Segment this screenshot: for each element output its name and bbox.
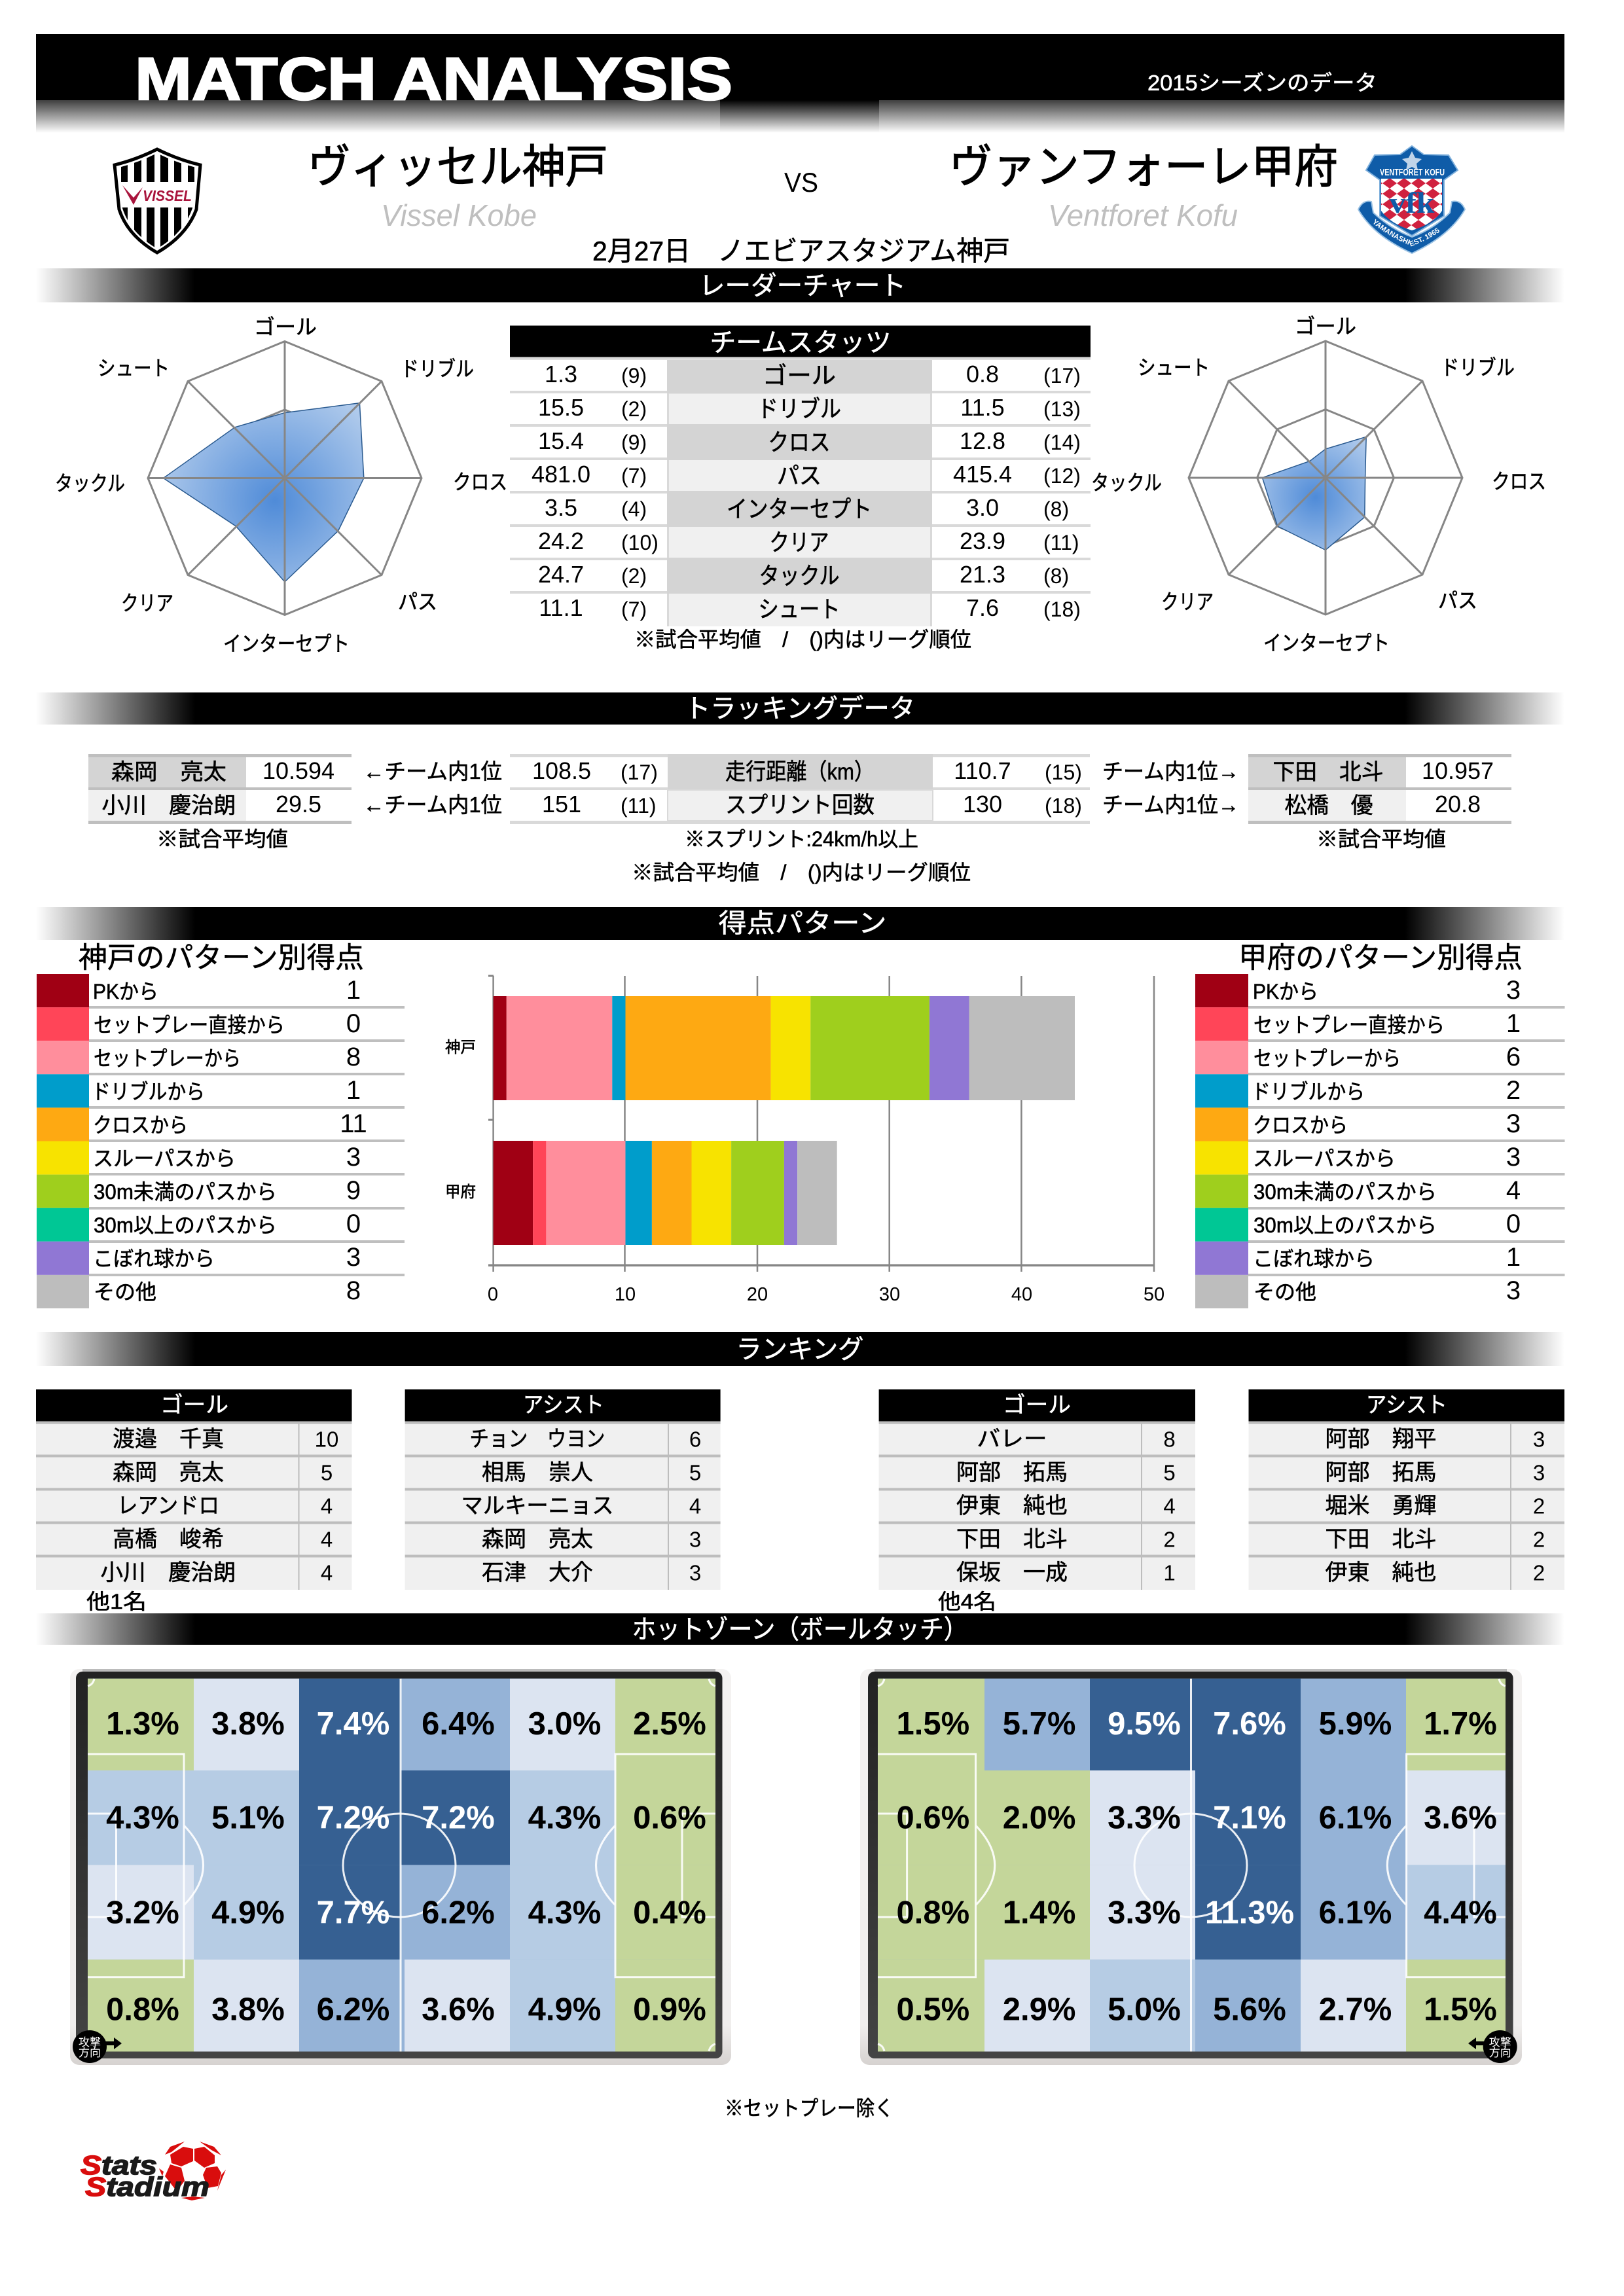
team stats table: 481.0: [532, 461, 590, 488]
team stats table: (7): [621, 598, 647, 621]
icon: Ventforet Kofu crest: vfk: [1389, 186, 1435, 219]
ranking table: Kobe goals: 4: [321, 1494, 333, 1518]
section bar: tracking data: トラッキングデータ: [685, 694, 915, 723]
radar chart: Kobe: クロス: [453, 470, 507, 493]
heat map: Kobe pitch: 3.8%: [211, 1992, 285, 2028]
footnotes: tracking: ※スプリント:24km/h以上: [685, 827, 918, 851]
legend panel: Kofu scoring patterns: [1195, 942, 1564, 1308]
heat map: Kofu pitch: 9.5%: [1108, 1706, 1181, 1742]
footnote: set plays excluded: ※セットプレー除く: [725, 2096, 893, 2120]
ranking table: Kobe goals: 高橋 峻希: [113, 1527, 224, 1552]
heat map: Kobe pitch: 2.5%: [633, 1706, 706, 1742]
ranking table: Kofu goals: 保坂 一成: [956, 1560, 1068, 1585]
header band: [36, 34, 1564, 133]
ranking table: Kofu goals: 2: [1163, 1528, 1176, 1552]
note: team first right: チーム内1位→: [1102, 793, 1239, 817]
heat map: Kofu pitch: 5.6%: [1213, 1992, 1286, 2028]
team stats table: 7.6: [966, 594, 999, 621]
heat map: Kobe pitch: 0.9%: [633, 1992, 706, 2028]
legend panel: Kofu scoring patterns: 3: [1506, 1276, 1521, 1305]
legend panel: Kobe scoring patterns: 11: [340, 1109, 367, 1138]
legend panel: Kofu scoring patterns: 30m以上のパスから: [1254, 1213, 1437, 1237]
legend panel: Kofu scoring patterns: その他: [1254, 1280, 1316, 1304]
team stats table: 12.8: [960, 427, 1005, 454]
team stats table: クリア: [770, 529, 829, 556]
heat map: Kobe pitch: 4.3%: [106, 1800, 179, 1835]
team stats table: 24.7: [538, 561, 584, 588]
tracking table: Kobe top players: [88, 754, 352, 824]
heat map: Kofu pitch: 0.5%: [897, 1992, 969, 2028]
stacked bar chart: goals by pattern: 30: [879, 1284, 900, 1305]
title: MATCH ANALYSIS: [135, 46, 732, 113]
radar chart: Kobe: インターセプト: [223, 632, 350, 656]
icon: Vissel Kobe crest: [115, 149, 200, 253]
footnotes: tracking: ※試合平均値: [156, 827, 288, 851]
ranking table: Kofu goals: バレー: [977, 1427, 1047, 1452]
note: others: 他4名: [938, 1590, 996, 1613]
ranking table: Kofu assists: 2: [1533, 1561, 1545, 1585]
legend panel: Kobe scoring patterns: 30m以上のパスから: [94, 1213, 277, 1237]
heat map: Kobe pitch: 6.2%: [422, 1895, 495, 1930]
heat map: Kobe pitch: 3.0%: [528, 1706, 601, 1742]
heat map: Kofu pitch: 3.3%: [1108, 1895, 1181, 1930]
legend panel: Kobe scoring patterns: 3: [346, 1243, 361, 1272]
legend panel: Kobe scoring patterns: その他: [94, 1280, 156, 1304]
team stats table: 24.2: [538, 528, 584, 554]
legend panel: Kofu scoring patterns: 4: [1506, 1176, 1521, 1205]
ranking table: Kofu assists: 伊東 純也: [1325, 1560, 1436, 1585]
heat map: Kobe pitch: 4.3%: [528, 1800, 601, 1835]
footnotes: tracking: [156, 827, 1446, 884]
ranking table: Kofu assists: 2: [1533, 1494, 1545, 1518]
heat map: Kobe pitch: 4.9%: [211, 1895, 285, 1930]
radar chart: Kofu: クリア: [1161, 590, 1214, 614]
heat map: Kofu pitch: 1.4%: [1003, 1895, 1075, 1930]
tracking table: Kofu top players: [1248, 754, 1511, 824]
legend panel: Kofu scoring patterns: 30m未満のパスから: [1254, 1180, 1437, 1204]
ranking table: Kobe goals: 森岡 亮太: [113, 1460, 224, 1485]
ranking table: Kobe assists: 相馬 崇人: [482, 1460, 593, 1485]
heat map: Kofu pitch: 0.6%: [897, 1800, 969, 1835]
ranking table: Kobe goals: レアンドロ: [117, 1494, 219, 1518]
ranking table: Kofu goals: 4: [1163, 1494, 1176, 1518]
footnote: team stats: ※試合平均値 / ()内はリーグ順位: [634, 628, 971, 651]
tracking table: team comparison: (11): [621, 794, 657, 817]
ranking table: Kobe assists: 4: [689, 1494, 701, 1518]
team name: Vissel Kobe: ヴィッセル神戸: [308, 141, 608, 192]
tracking table: Kobe top players: 小川 慶治朗: [102, 793, 236, 818]
legend panel: Kofu scoring patterns: PKから: [1253, 980, 1318, 1003]
legend panel: Kofu scoring patterns: 甲府のパターン別得点: [1238, 942, 1523, 974]
tracking table: team comparison: 130: [963, 791, 1002, 817]
heat map: Kofu pitch: 2.7%: [1319, 1992, 1392, 2028]
legend panel: Kobe scoring patterns: セットプレー直接から: [94, 1013, 285, 1037]
tracking table: team comparison: 108.5: [532, 757, 591, 784]
legend panel: Kobe scoring patterns: こぼれ球から: [93, 1247, 215, 1270]
team stats table: (8): [1043, 564, 1069, 588]
radar chart: Kobe: [55, 315, 507, 656]
icon: Ventforet Kofu crest: [1358, 145, 1466, 254]
team name: Vissel Kobe: Vissel Kobe: [381, 198, 537, 232]
team stats table: (12): [1043, 464, 1081, 488]
season note: 2015シーズンのデータ: [1147, 71, 1377, 95]
legend panel: Kofu scoring patterns: 3: [1506, 1143, 1521, 1172]
team name: Ventforet Kofu: ヴァンフォーレ甲府: [949, 141, 1338, 192]
legend panel: Kobe scoring patterns: スルーパスから: [93, 1147, 236, 1170]
ranking table: Kofu assists: 3: [1533, 1461, 1545, 1485]
icon: attack direction right: 攻撃: [79, 2036, 101, 2049]
legend panel: Kobe scoring patterns: 神戸のパターン別得点: [79, 942, 364, 974]
ranking table: Kofu assists: 阿部 拓馬: [1325, 1460, 1436, 1485]
tracking table: Kofu top players: 下田 北斗: [1272, 760, 1384, 785]
ranking table: Kobe goals: 4: [321, 1561, 333, 1585]
legend panel: Kobe scoring patterns: PKから: [93, 980, 158, 1003]
legend panel: Kofu scoring patterns: 3: [1506, 976, 1521, 1005]
radar chart: Kobe: クリア: [121, 592, 173, 615]
heat map: Kobe pitch: 0.8%: [106, 1992, 179, 2028]
tracking table: Kofu top players: 松橋 優: [1284, 793, 1373, 818]
team stats table: クロス: [768, 429, 830, 456]
note: team first left: ←チーム内1位: [363, 759, 502, 783]
team stats table: [510, 326, 1091, 651]
heat map: Kofu pitch: 4.4%: [1424, 1895, 1497, 1930]
section bar: ranking: [36, 1332, 1564, 1366]
ranking table: Kobe assists: 石津 大介: [482, 1560, 593, 1585]
ranking table: Kobe goals: 小川 慶治朗: [101, 1560, 236, 1585]
team stats table: 15.4: [538, 427, 584, 454]
ranking table: Kofu goals: 8: [1163, 1427, 1176, 1452]
legend panel: Kobe scoring patterns: 8: [346, 1276, 361, 1305]
ranking table: Kobe assists: チョン ウヨン: [470, 1427, 605, 1452]
section bar: radar chart: レーダーチャート: [699, 272, 906, 300]
stacked bar chart: goals by pattern: 40: [1011, 1284, 1032, 1305]
tracking table: team comparison: (17): [621, 761, 658, 784]
legend panel: Kobe scoring patterns: [37, 942, 405, 1308]
ranking table: Kofu assists: 阿部 翔平: [1325, 1427, 1436, 1452]
section bar: radar chart: [36, 268, 1564, 302]
heat map: Kobe pitch: 7.2%: [317, 1800, 389, 1835]
legend panel: Kofu scoring patterns: こぼれ球から: [1253, 1247, 1375, 1270]
team stats table: 11.5: [960, 394, 1005, 421]
note: team first left: ←チーム内1位: [363, 793, 502, 817]
heat map: Kobe pitch: 3.8%: [211, 1706, 285, 1742]
legend panel: Kofu scoring patterns: 3: [1506, 1109, 1521, 1138]
radar chart: Kofu: ドリブル: [1441, 356, 1515, 380]
heat map: Kofu pitch: 3.3%: [1108, 1800, 1181, 1835]
heat map: Kobe pitch: 0.6%: [633, 1800, 706, 1835]
heat map: Kofu pitch: 5.7%: [1003, 1706, 1075, 1742]
ranking table: Kofu goals: 下田 北斗: [956, 1527, 1068, 1552]
team stats table: シュート: [758, 596, 840, 622]
stacked bar chart: goals by pattern: 50: [1144, 1284, 1164, 1305]
team stats table: 23.9: [960, 528, 1005, 554]
ranking table: Kobe goals: 渡邉 千真: [113, 1427, 224, 1452]
team stats table: ドリブル: [757, 395, 841, 422]
tracking table: team comparison: (15): [1045, 761, 1082, 784]
ranking table: Kobe goals: 10: [315, 1427, 338, 1452]
legend panel: Kobe scoring patterns: 9: [346, 1176, 361, 1205]
team stats table: (13): [1043, 397, 1081, 421]
team name: Ventforet Kofu: Ventforet Kofu: [1048, 198, 1238, 232]
legend panel: Kofu scoring patterns: 6: [1506, 1043, 1521, 1071]
section bar: hot zone: ホットゾーン（ボールタッチ）: [632, 1615, 967, 1644]
heat map: Kofu pitch: [860, 1669, 1522, 2065]
tracking table: Kofu top players: 20.8: [1435, 791, 1481, 817]
team name: Vissel Kobe: [308, 141, 608, 232]
note: others: 他1名: [86, 1590, 147, 1613]
heat map: Kobe pitch: [70, 1669, 731, 2065]
ranking table: Kofu assists: [1249, 1390, 1564, 1590]
team stats table: 15.5: [538, 394, 584, 421]
team stats table: (2): [621, 564, 647, 588]
tracking table: team comparison: 151: [542, 791, 581, 817]
ranking table: Kobe assists: 3: [689, 1561, 701, 1585]
icon: attack direction right: [73, 2030, 122, 2063]
ranking table: Kobe assists: [405, 1390, 721, 1590]
team stats table: 21.3: [960, 561, 1005, 588]
radar chart: Kobe: パス: [398, 590, 437, 614]
legend panel: Kobe scoring patterns: 0: [346, 1009, 361, 1038]
team stats table: (18): [1043, 598, 1081, 621]
match date and stadium: 2月27日 ノエビアスタジアム神戸: [592, 236, 1010, 266]
team stats table: ゴール: [763, 362, 836, 389]
team stats table: (2): [621, 397, 647, 421]
ranking table: Kobe assists: 6: [689, 1427, 701, 1452]
tracking table: team comparison: スプリント回数: [725, 793, 875, 818]
team stats table: 0.8: [966, 361, 999, 387]
heat map: Kobe pitch: 0.4%: [633, 1895, 706, 1930]
heat map: Kofu pitch: 1.5%: [1424, 1992, 1497, 2028]
team stats table: パス: [777, 462, 821, 489]
legend panel: Kobe scoring patterns: 1: [346, 976, 361, 1005]
ranking table: Kobe goals: 5: [321, 1461, 333, 1485]
legend panel: Kofu scoring patterns: セットプレー直接から: [1254, 1013, 1445, 1037]
ranking table: Kofu assists: 下田 北斗: [1325, 1527, 1436, 1552]
heat map: Kofu pitch: 5.9%: [1319, 1706, 1392, 1742]
ranking table: Kofu goals: 5: [1163, 1461, 1176, 1485]
heat map: Kobe pitch: 7.2%: [422, 1800, 495, 1835]
ranking table: Kofu assists: 3: [1533, 1427, 1545, 1452]
section bar: scoring patterns: [36, 907, 1564, 940]
tracking table: team comparison: 走行距離（km）: [725, 759, 875, 785]
legend panel: Kofu scoring patterns: 2: [1506, 1076, 1521, 1105]
legend panel: Kofu scoring patterns: 1: [1506, 1243, 1521, 1272]
heat map: Kofu pitch: 2.0%: [1003, 1800, 1075, 1835]
icon: attack direction left: 攻撃: [1489, 2036, 1511, 2049]
stacked bar chart: goals by pattern: [445, 976, 1164, 1305]
ranking table: Kobe goals: [36, 1390, 352, 1613]
heat map: Kofu pitch: 2.9%: [1003, 1992, 1075, 2028]
legend panel: Kobe scoring patterns: 8: [346, 1043, 361, 1071]
team stats table: (4): [621, 497, 647, 521]
radar chart: Kofu: タックル: [1091, 471, 1162, 495]
team stats table: 3.0: [966, 494, 999, 521]
stacked bar chart: goals by pattern: 神戸: [445, 1039, 476, 1056]
radar chart: Kofu: ゴール: [1295, 314, 1356, 338]
radar chart: Kofu: [1091, 314, 1546, 655]
ranking table: Kofu goals: ゴール: [1003, 1393, 1071, 1418]
footnotes: tracking: ※試合平均値: [1316, 827, 1446, 851]
radar chart: Kofu: パス: [1438, 589, 1477, 613]
logo: Stats Stadium: Stats: [81, 2150, 157, 2180]
legend panel: Kofu scoring patterns: 0: [1506, 1210, 1521, 1238]
heat map: Kobe pitch: 1.3%: [106, 1706, 179, 1742]
legend panel: Kobe scoring patterns: 30m未満のパスから: [94, 1180, 277, 1204]
team stats table: (9): [621, 431, 647, 454]
legend panel: Kobe scoring patterns: 3: [346, 1143, 361, 1172]
team stats table: (10): [621, 531, 659, 554]
icon: Ventforet Kofu crest: YAMANASHI EST. 1965: [1373, 219, 1439, 246]
note: team first right: [1102, 759, 1239, 817]
ranking table: Kobe assists: 5: [689, 1461, 701, 1485]
icon: Ventforet Kofu crest: VENTFORET KOFU: [1380, 167, 1445, 178]
heat map: Kobe pitch: 6.4%: [422, 1706, 495, 1742]
radar chart: Kofu: シュート: [1138, 356, 1210, 380]
heat map: Kofu pitch: 3.6%: [1424, 1800, 1497, 1835]
tracking table: team comparison: 110.7: [954, 757, 1011, 784]
heat map: Kofu pitch: 7.6%: [1213, 1706, 1286, 1742]
bar: Kofu: [494, 1141, 837, 1245]
icon: Vissel Kobe crest: VISSEL: [143, 187, 192, 204]
section bar: tracking data: [36, 692, 1564, 725]
ranking table: Kobe assists: 森岡 亮太: [482, 1527, 593, 1552]
heat map: Kofu pitch: 1.7%: [1424, 1706, 1497, 1742]
legend panel: Kobe scoring patterns: ドリブルから: [92, 1080, 205, 1103]
ranking table: Kobe assists: アシスト: [523, 1393, 604, 1418]
icon: attack direction right: 方向: [79, 2047, 101, 2059]
ranking table: Kofu assists: 堀米 勇輝: [1325, 1494, 1436, 1518]
heat map: Kobe pitch: 4.9%: [528, 1992, 601, 2028]
ranking table: Kobe goals: ゴール: [160, 1393, 228, 1418]
vs label: VS: [784, 167, 818, 198]
team stats table: 415.4: [953, 461, 1012, 488]
legend panel: Kofu scoring patterns: セットプレーから: [1254, 1047, 1401, 1070]
stacked bar chart: goals by pattern: 10: [615, 1284, 636, 1305]
ranking table: Kofu goals: 1: [1163, 1561, 1176, 1585]
legend panel: Kobe scoring patterns: セットプレーから: [94, 1047, 241, 1070]
heat map: Kobe pitch: 3.2%: [106, 1895, 179, 1930]
heat map: Kofu pitch: 0.8%: [897, 1895, 969, 1930]
heat map: Kobe pitch: 4.3%: [528, 1895, 601, 1930]
stacked bar chart: goals by pattern: 20: [747, 1284, 768, 1305]
tracking table: team comparison: (18): [1045, 794, 1082, 817]
team stats table: 11.1: [539, 594, 583, 621]
ranking table: Kofu assists: 2: [1533, 1528, 1545, 1552]
icon: attack direction left: [1468, 2030, 1517, 2063]
note: team first right: チーム内1位→: [1102, 759, 1239, 783]
bar: Kobe: [494, 996, 1075, 1100]
ranking table: Kobe assists: マルキーニョス: [461, 1494, 614, 1518]
heat map: Kobe pitch: 3.6%: [422, 1992, 495, 2028]
ranking table: Kofu goals: 伊東 純也: [956, 1494, 1068, 1518]
stacked bar chart: goals by pattern: 0: [488, 1284, 498, 1305]
radar chart: Kobe: シュート: [98, 356, 170, 380]
stacked bar chart: goals by pattern: 甲府: [445, 1183, 476, 1201]
team stats table: (7): [621, 464, 647, 488]
team stats table: (9): [621, 364, 647, 387]
radar chart: Kobe: タックル: [55, 471, 125, 495]
tracking table: Kofu top players: 10.957: [1422, 757, 1494, 784]
ranking table: Kofu assists: アシスト: [1366, 1393, 1447, 1418]
ranking table: Kofu goals: 阿部 拓馬: [956, 1460, 1068, 1485]
legend panel: Kofu scoring patterns: 1: [1506, 1009, 1521, 1038]
tracking table: Kobe top players: 29.5: [276, 791, 321, 817]
radar chart: Kofu: インターセプト: [1263, 631, 1390, 655]
legend panel: Kobe scoring patterns: 0: [346, 1210, 361, 1238]
heat map: Kofu pitch: 1.5%: [897, 1706, 969, 1742]
radar chart: Kobe: ゴール: [254, 315, 317, 339]
icon: attack direction left: 方向: [1489, 2047, 1511, 2059]
heat map: Kobe pitch: 7.4%: [317, 1706, 389, 1742]
heat map: Kobe pitch: 5.1%: [211, 1800, 285, 1835]
section bar: scoring patterns: 得点パターン: [719, 909, 886, 938]
tracking table: team comparison: [510, 754, 1090, 824]
team stats table: (14): [1043, 431, 1081, 454]
team stats table: (8): [1043, 497, 1069, 521]
ranking table: Kobe assists: 3: [689, 1528, 701, 1552]
legend panel: Kofu scoring patterns: ドリブルから: [1252, 1080, 1365, 1103]
heat map: Kobe pitch: 7.7%: [317, 1895, 389, 1930]
legend panel: Kobe scoring patterns: 1: [346, 1076, 361, 1105]
team stats table: 1.3: [545, 361, 577, 387]
team stats table: (11): [1043, 531, 1079, 554]
team name: Ventforet Kofu: [949, 141, 1338, 232]
logo: Stats Stadium: [81, 2142, 226, 2202]
ranking table: Kofu goals: [879, 1390, 1195, 1613]
section bar: ranking: ランキング: [736, 1335, 864, 1364]
footnotes: tracking: ※試合平均値 / ()内はリーグ順位: [632, 861, 971, 884]
radar chart: Kobe: ドリブル: [401, 357, 474, 381]
logo: Stats Stadium: Stadium: [85, 2172, 209, 2202]
team stats table: インターセプト: [727, 495, 872, 522]
legend panel: Kobe scoring patterns: クロスから: [93, 1113, 188, 1137]
legend panel: Kofu scoring patterns: スルーパスから: [1253, 1147, 1396, 1170]
heat map: Kofu pitch: 7.1%: [1213, 1800, 1286, 1835]
heat map: Kobe pitch: 6.2%: [317, 1992, 389, 2028]
ranking table: Kobe goals: 4: [321, 1528, 333, 1552]
team stats table: 3.5: [545, 494, 577, 521]
radar chart: Kofu: クロス: [1492, 470, 1546, 493]
heat map: Kofu pitch: 6.1%: [1319, 1800, 1392, 1835]
heat map: Kofu pitch: 6.1%: [1319, 1895, 1392, 1930]
team stats table: チームスタッツ: [710, 329, 892, 357]
heat map: Kofu pitch: 11.3%: [1205, 1895, 1294, 1930]
tracking table: Kobe top players: 10.594: [262, 757, 334, 784]
team stats table: タックル: [759, 562, 839, 589]
legend panel: Kofu scoring patterns: クロスから: [1253, 1113, 1348, 1137]
heat map: Kofu pitch: 5.0%: [1108, 1992, 1181, 2028]
tracking table: Kobe top players: 森岡 亮太: [111, 760, 226, 785]
section bar: hot zone: [36, 1613, 1564, 1645]
team stats table: (17): [1043, 364, 1081, 387]
note: team first left: [363, 759, 502, 817]
